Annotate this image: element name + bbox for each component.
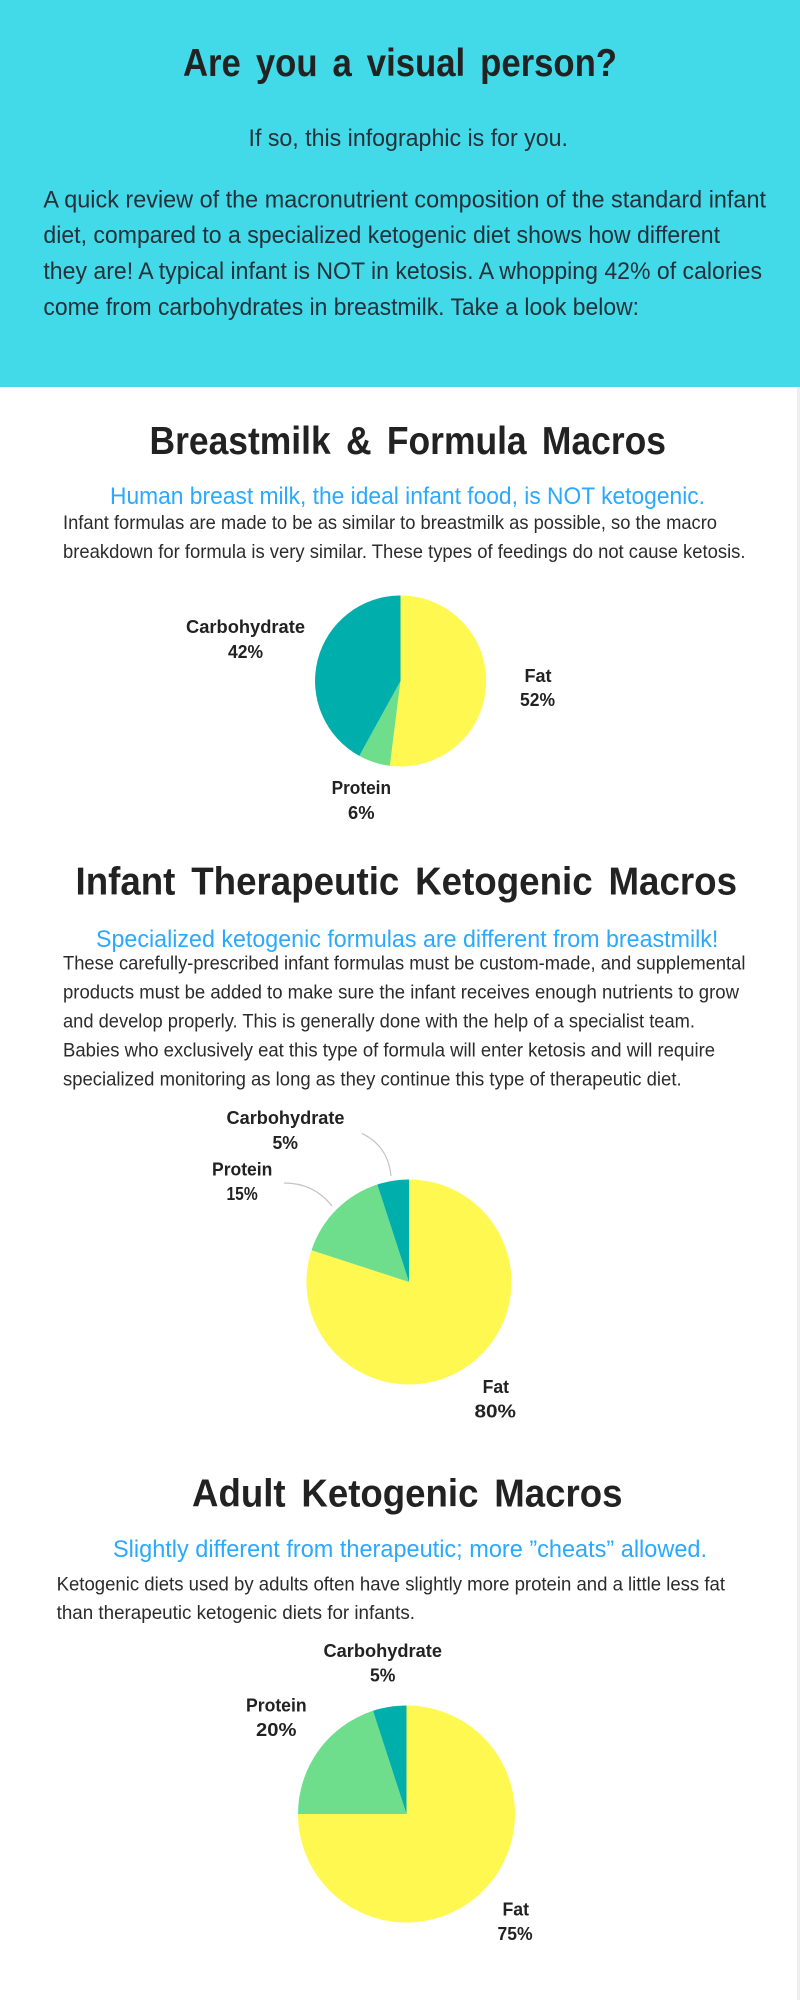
body text: breakdown for formula is very similar. These types of feedings do not cause ketosis. xyxy=(63,541,746,563)
intro paragraph: A quick review of the macronutrient composition of the standard infant xyxy=(43,186,766,214)
label: carbohydrate 5% xyxy=(226,1108,344,1153)
pie chart: breastmilk macros xyxy=(315,595,486,766)
subheading: Specialized ketogenic formulas are different from breastmilk! xyxy=(96,926,718,953)
label: protein 6% xyxy=(332,778,391,823)
body text: products must be added to make sure the infant receives enough nutrients to grow xyxy=(63,982,740,1004)
panel: intro header xyxy=(0,0,800,387)
title: Are you a visual person? xyxy=(183,42,617,85)
panel: adult ketogenic macros xyxy=(57,1472,726,1944)
label: fat 80% xyxy=(474,1377,516,1422)
body text: than therapeutic ketogenic diets for infants. xyxy=(57,1602,415,1624)
pie chart: adult macros xyxy=(298,1706,515,1922)
label: carbohydrate 5%: 5% xyxy=(272,1133,298,1153)
label: protein 6%: 6% xyxy=(348,803,374,823)
label: carbohydrate 42%: Carbohydrate xyxy=(186,617,305,637)
label: protein 20%: 20% xyxy=(256,1720,296,1740)
label: protein 20%: Protein xyxy=(246,1696,307,1716)
label: fat 75%: 75% xyxy=(498,1924,533,1944)
body text: specialized monitoring as long as they continue this type of therapeutic diet. xyxy=(63,1068,682,1090)
body text: and develop properly. This is generally done with the help of a specialist team. xyxy=(63,1011,695,1033)
subheading: Slightly different from therapeutic; more ”cheats” allowed. xyxy=(113,1536,707,1563)
body text: Ketogenic diets used by adults often have slightly more protein and a little less fat xyxy=(57,1573,726,1595)
label: protein 6%: Protein xyxy=(332,778,391,798)
label: protein 15% xyxy=(212,1160,272,1204)
intro paragraph: diet, compared to a specialized ketogenic diet shows how different xyxy=(43,222,720,249)
subtitle: If so, this infographic is for you. xyxy=(248,125,568,152)
subheading: Human breast milk, the ideal infant food, is NOT ketogenic. xyxy=(110,483,705,510)
label: carbohydrate 5%: Carbohydrate xyxy=(226,1108,344,1128)
label: carbohydrate 42%: 42% xyxy=(228,642,263,662)
label: fat 80%: Fat xyxy=(483,1377,509,1397)
body text: Infant formulas are made to be as similar to breastmilk as possible, so the macro xyxy=(63,512,717,534)
intro paragraph: come from carbohydrates in breastmilk. Take a look below: xyxy=(43,294,639,321)
label: protein 15%: 15% xyxy=(226,1184,258,1204)
label: carbohydrate 5%: Carbohydrate xyxy=(324,1641,442,1661)
label: fat 52% xyxy=(520,666,555,710)
body text: These carefully-prescribed infant formulas must be custom-made, and supplemental xyxy=(63,952,745,974)
intro paragraph xyxy=(43,186,766,321)
label: fat 75% xyxy=(498,1900,533,1944)
label: fat 80%: 80% xyxy=(474,1402,516,1422)
label: carbohydrate 42% xyxy=(186,617,305,662)
panel: infant therapeutic ketogenic macros xyxy=(63,860,745,1422)
heading: Adult Ketogenic Macros xyxy=(192,1472,622,1515)
intro paragraph: they are! A typical infant is NOT in ketosis. A whopping 42% of calories xyxy=(43,258,762,285)
pie chart: therapeutic macros xyxy=(306,1179,511,1384)
body text xyxy=(57,1573,726,1624)
label: carbohydrate 5%: 5% xyxy=(370,1666,395,1686)
leader line: protein xyxy=(284,1183,332,1206)
heading: Infant Therapeutic Ketogenic Macros xyxy=(76,860,737,903)
label: fat 52%: Fat xyxy=(524,666,552,686)
panel: breastmilk and formula macros xyxy=(63,420,746,823)
label: fat 75%: Fat xyxy=(502,1900,529,1920)
label: fat 52%: 52% xyxy=(520,690,555,710)
leader line: carbohydrate xyxy=(362,1133,391,1176)
label: protein 15%: Protein xyxy=(212,1160,272,1180)
body text xyxy=(63,952,745,1090)
label: carbohydrate 5% xyxy=(324,1641,442,1686)
body text: Babies who exclusively eat this type of formula will enter ketosis and will require xyxy=(63,1039,715,1061)
label: protein 20% xyxy=(246,1696,307,1740)
body text xyxy=(63,512,746,563)
heading: Breastmilk & Formula Macros xyxy=(150,420,666,463)
